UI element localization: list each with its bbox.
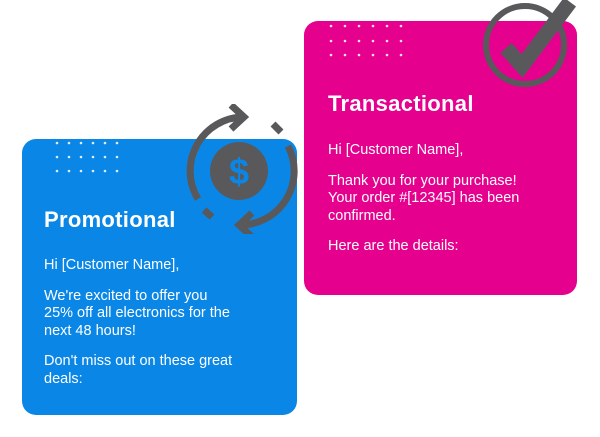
text: transactional body: Hi [Customer Name], <box>328 142 463 158</box>
text: transactional body: Thank you for your purchase! <box>328 172 517 188</box>
panel: promotional <box>22 139 297 415</box>
heading: Transactional: Transactional <box>328 91 474 116</box>
text: transactional body <box>328 142 519 254</box>
text: promotional body: Hi [Customer Name], <box>44 257 179 273</box>
dot pattern <box>56 142 118 172</box>
text: promotional body: We're excited to offer you <box>44 288 207 304</box>
icon: checkmark <box>483 0 576 87</box>
dot pattern <box>330 24 402 56</box>
text: transactional body: Here are the details: <box>328 238 459 254</box>
icon: dollar cycle <box>186 104 298 234</box>
heading: Promotional: Promotional <box>44 207 176 232</box>
text: promotional body: next 48 hours! <box>44 322 136 338</box>
text: promotional body: 25% off all electronics for the <box>44 305 230 321</box>
text: promotional body: Don't miss out on these great <box>44 353 232 369</box>
icon: dollar cycle: $ <box>229 151 249 192</box>
text: transactional body: confirmed. <box>328 208 396 224</box>
panel: transactional <box>304 21 577 295</box>
text: promotional body <box>44 257 232 386</box>
text: promotional body: deals: <box>44 370 83 386</box>
text: transactional body: Your order #[12345] has been <box>328 190 519 206</box>
